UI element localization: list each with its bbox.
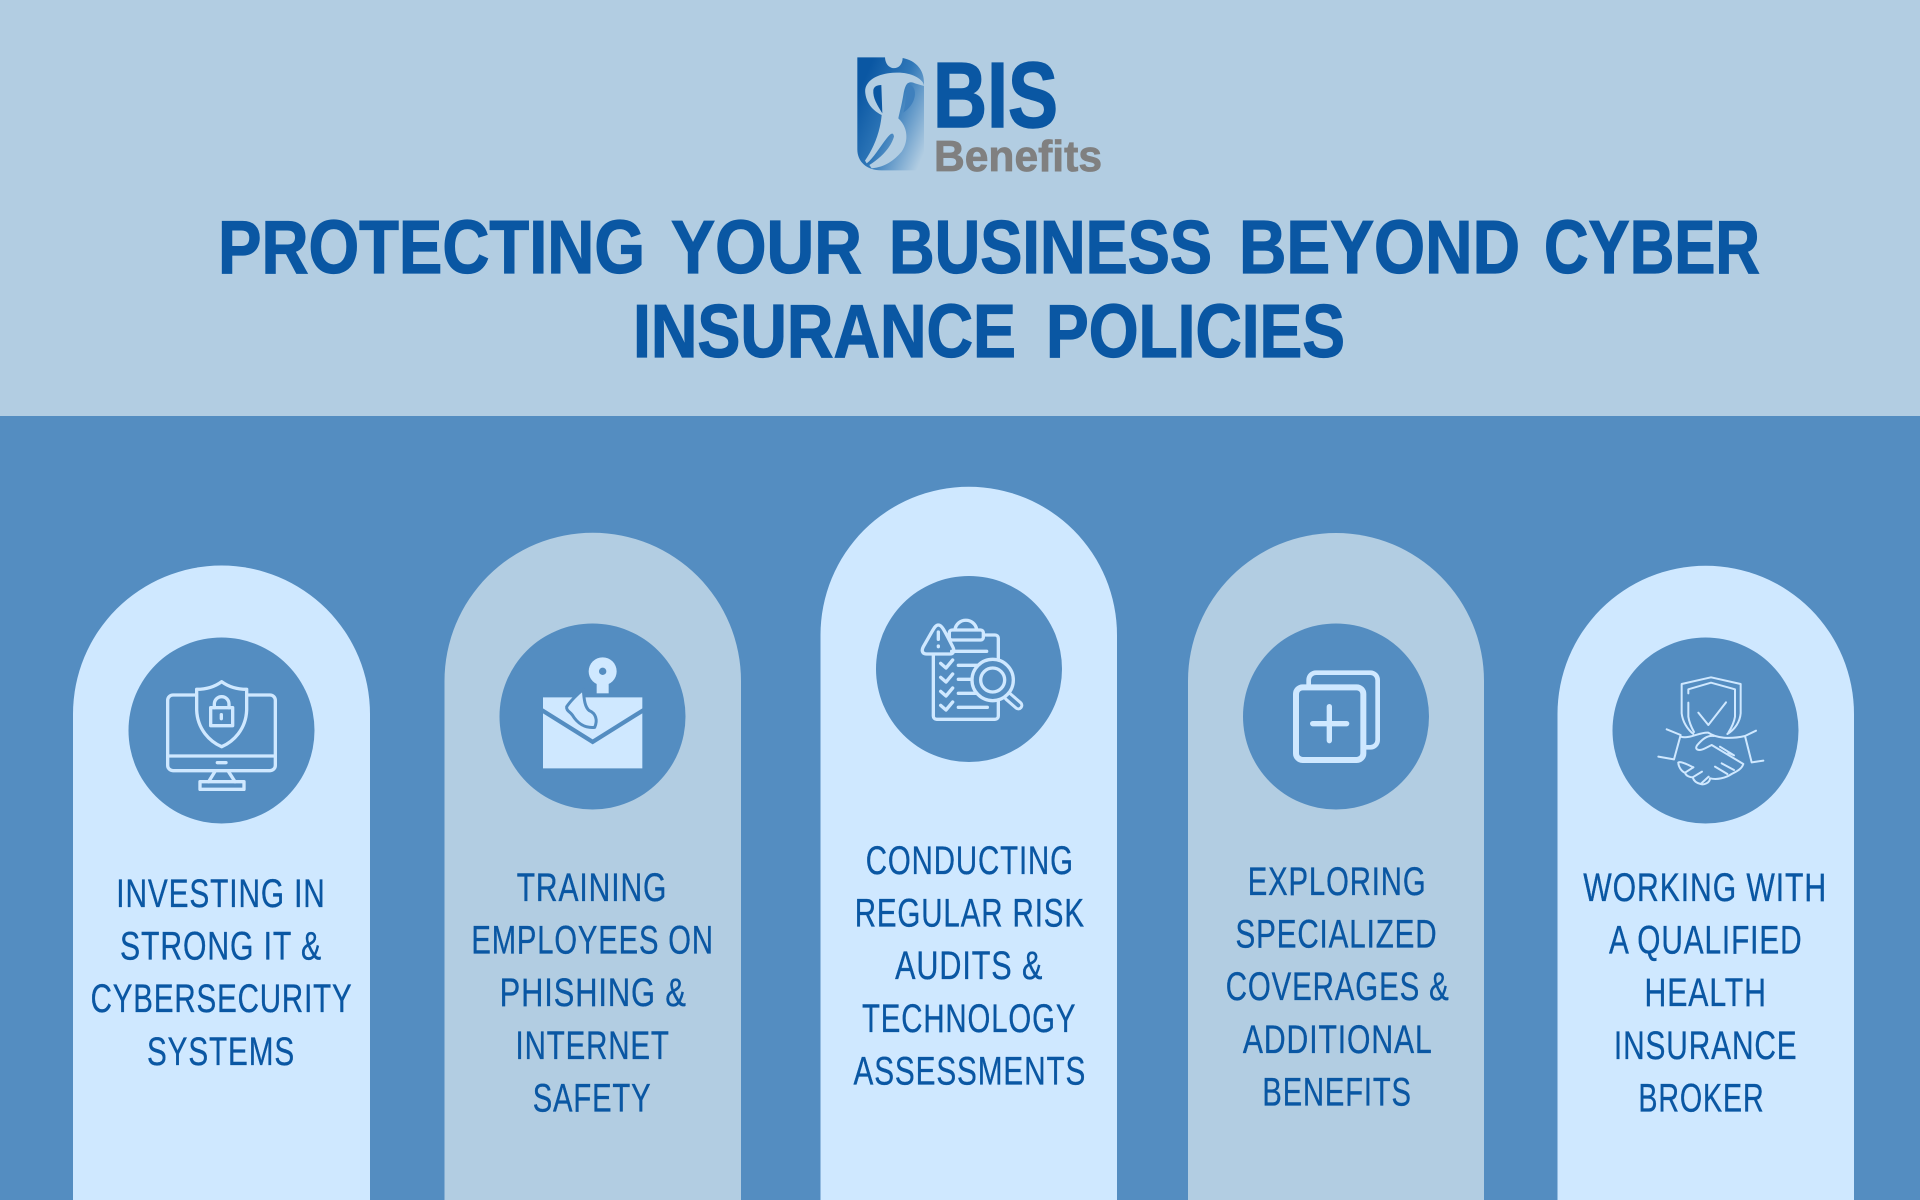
panel: training employees (444, 533, 741, 1200)
text block: EMPLOYEES ON (471, 919, 714, 963)
text block: WORKING WITH (1583, 866, 1827, 910)
title: PROTECTING (218, 205, 645, 289)
text block: EXPLORING (1248, 860, 1426, 904)
text block: AUDITS & (895, 944, 1043, 988)
text block: A QUALIFIED (1609, 919, 1802, 963)
text block (1583, 866, 1827, 1120)
icon: stacked cards with plus (1296, 673, 1378, 760)
title (218, 205, 1760, 373)
arch card (1558, 566, 1854, 1200)
text block: CONDUCTING (866, 839, 1074, 883)
icon circle (1612, 638, 1798, 824)
text block: STRONG IT & (120, 925, 322, 969)
text block: INSURANCE (1614, 1024, 1798, 1068)
arch card (444, 533, 741, 1200)
text block: INTERNET (516, 1024, 670, 1068)
text block (471, 866, 714, 1120)
text block: INVESTING IN (116, 872, 326, 916)
text block: COVERAGES & (1226, 965, 1450, 1009)
panel: qualified broker (1558, 566, 1854, 1200)
arch card (820, 487, 1117, 1200)
title: POLICIES (1046, 289, 1345, 373)
title: BUSINESS (889, 205, 1212, 289)
text block: CYBERSECURITY (91, 977, 353, 1021)
panel: risk audits (820, 487, 1117, 1200)
title: YOUR (671, 205, 862, 289)
arch card (73, 566, 370, 1200)
text block: SAFETY (533, 1076, 652, 1120)
text block: SYSTEMS (147, 1030, 295, 1074)
text block: TECHNOLOGY (862, 997, 1076, 1041)
text block: BROKER (1638, 1076, 1764, 1120)
text block: ASSESSMENTS (854, 1049, 1086, 1093)
text block: PHISHING & (500, 971, 687, 1015)
icon circle (128, 638, 314, 824)
text block: HEALTH (1644, 971, 1767, 1015)
icon: monitor with shield lock (168, 682, 275, 789)
text block: SPECIALIZED (1236, 913, 1438, 957)
title: BEYOND (1239, 205, 1520, 289)
icon: handshake with shield (1658, 677, 1763, 784)
logo: BIS Benefits (857, 43, 1102, 181)
icon circle (876, 576, 1062, 762)
icon: clipboard with magnifier and warning (922, 620, 1018, 719)
text block: ADDITIONAL (1243, 1018, 1433, 1062)
text block (1226, 860, 1450, 1114)
text block: BENEFITS (1262, 1070, 1412, 1114)
text block: TRAINING (517, 866, 667, 910)
title: CYBER (1544, 205, 1760, 289)
title: INSURANCE (633, 289, 1016, 373)
panel: investing in IT and cybersecurity (73, 566, 370, 1200)
header band (0, 0, 1920, 416)
logo wordmark Benefits: Benefits (934, 132, 1102, 181)
text block (91, 872, 353, 1074)
text block (854, 839, 1086, 1094)
icon: runner shield (857, 57, 924, 170)
icon circle (1243, 624, 1429, 810)
icon: phishing hook on envelope (543, 657, 642, 768)
arch card (1188, 533, 1484, 1200)
logo wordmark BIS: BIS (933, 43, 1058, 147)
text block: REGULAR RISK (855, 892, 1085, 936)
panel: specialized coverages (1188, 533, 1484, 1200)
icon circle (500, 624, 686, 810)
